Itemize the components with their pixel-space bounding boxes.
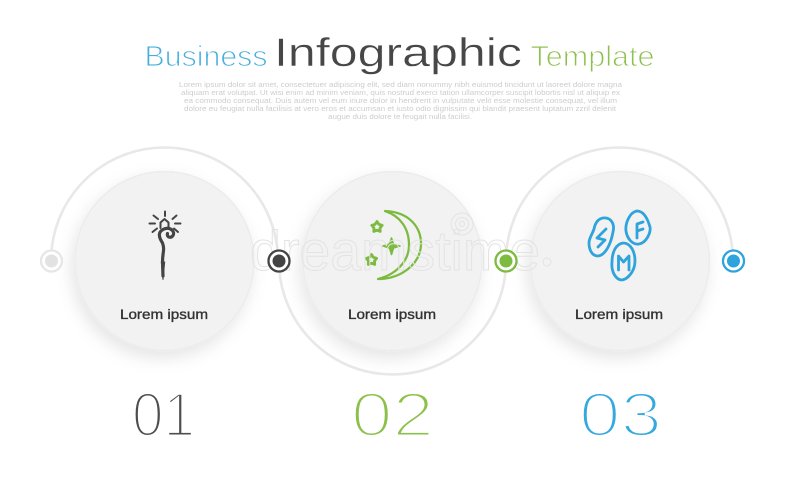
panel: step 1 [75,172,254,350]
intro paragraph [179,80,622,121]
title word: Infographic: Infographic [274,31,522,75]
intro paragraph: augue duis dolore te feugait nulla facilisi. [328,112,472,121]
title [144,31,654,75]
node: step 2 [496,250,516,272]
node: start [41,250,62,272]
intro paragraph: dolore eu feugiat nulla facilisis at vero eros et accumsan et iusto odio dignissim qui blandit praesent luptatum zzril delenit [184,104,616,113]
node: step 1 [268,250,290,272]
number 01: 01 [132,381,195,450]
icon: magic staff [150,212,180,280]
step 1 disc [75,172,254,350]
node: step 3 [723,250,744,272]
watermark: dreamstime [250,219,540,282]
panel: step 2 [303,172,482,350]
icon: crescent moon and stars [366,211,421,279]
connecting ring path [51,147,733,374]
step 2 disc [303,172,482,350]
intro paragraph: ea commodo consequat. Duis autem vel eum iriure dolor in hendrerit in vulputate velit esse molestie consequat, vel illum [184,96,617,105]
title word: Template: Template [530,41,654,73]
step 2 label: Lorem ipsum [348,307,436,322]
intro paragraph: aliquam erat volutpat. Ut wisi enim ad minim veniam, quis nostrud exerci tation ullamcorper suscipit lobortis nisl ut aliquip ex [181,88,620,97]
number 02: 02 [351,381,434,450]
title word: Business: Business [144,41,268,73]
step 3 label: Lorem ipsum [575,307,663,322]
step 3 disc [530,172,710,350]
intro paragraph: Lorem ipsum dolor sit amet, consectetuer adipiscing elit, sed diam nonummy nibh euismod tincidunt ut laoreet dolore magna [179,80,622,89]
panel: step 3 [530,172,710,350]
step 1 label: Lorem ipsum [120,307,208,322]
icon: rune stones [589,211,650,280]
number 03: 03 [579,381,662,450]
